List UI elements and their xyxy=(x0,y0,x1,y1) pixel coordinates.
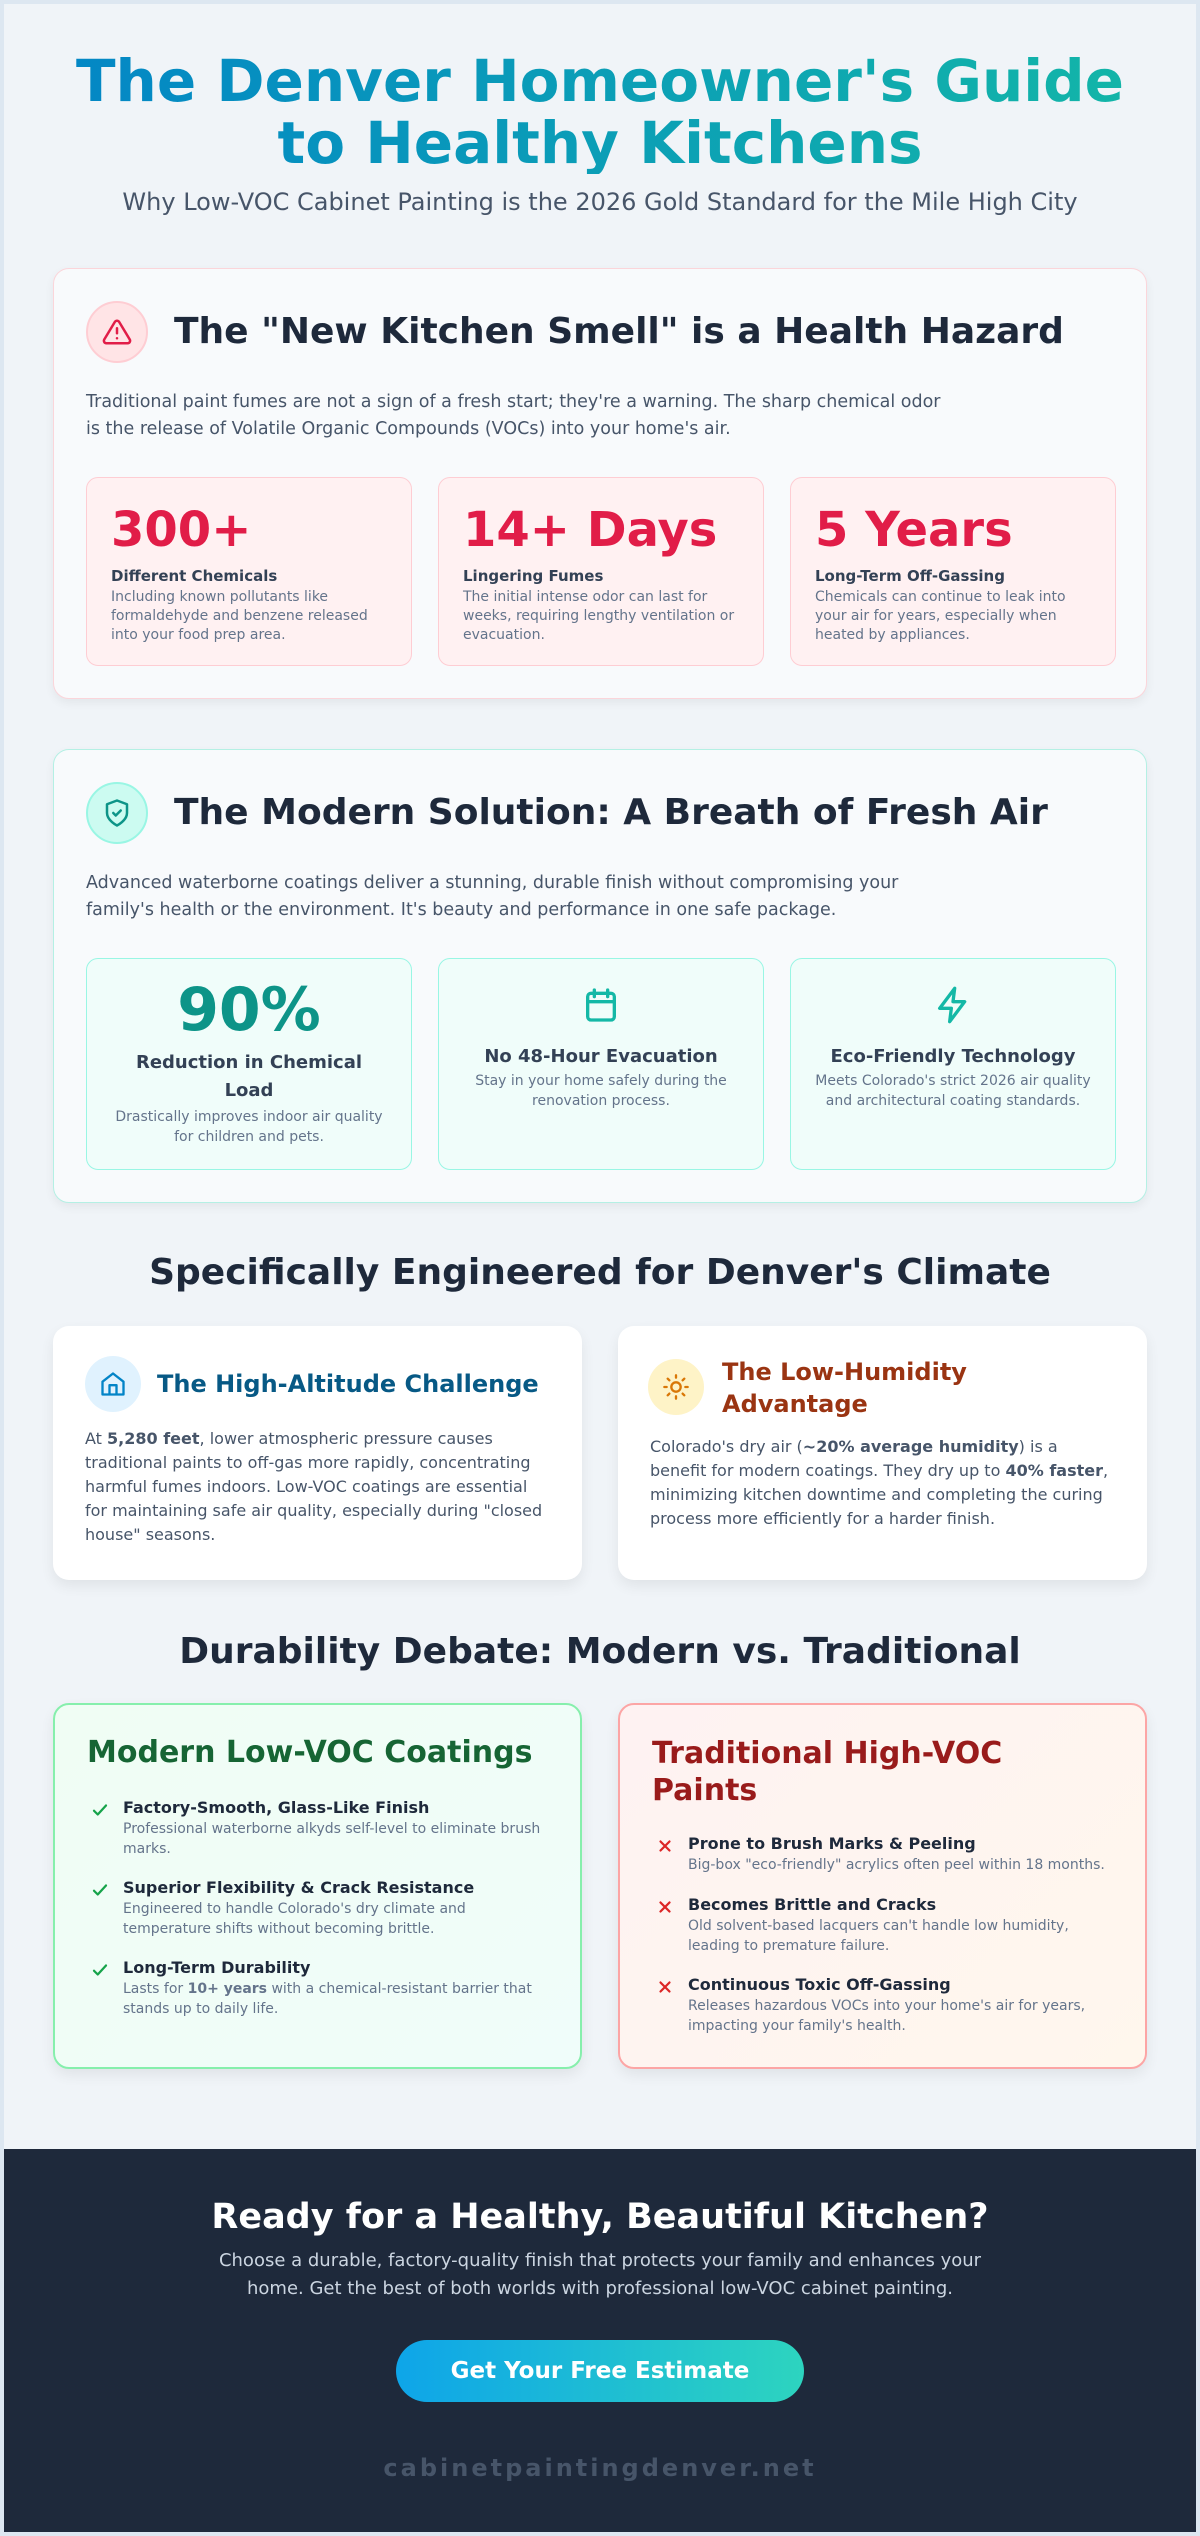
body: Colorado's dry air (~20% average humidity) is a benefit for modern coatings. They dry up to 40% faster, minimizing kitchen downtime and completing the curing process more efficiently for a harder finish. xyxy=(650,1437,1108,1528)
stat: 300+: 300+ xyxy=(111,502,251,558)
title xyxy=(652,1736,1002,1808)
benefit: eco tech xyxy=(790,958,1116,1170)
stat: 14+ days: The initial intense odor can last for weeks, requiring lengthy ventilation or evacuation. xyxy=(463,589,734,643)
title: Traditional High-VOC xyxy=(652,1736,1002,1771)
item: Old solvent-based lacquers can't handle low humidity, leading to premature failure. xyxy=(688,1918,1069,1954)
icon: warning xyxy=(86,301,148,363)
item xyxy=(659,1975,1085,2034)
heading: durability: Durability Debate: Modern vs. Traditional xyxy=(179,1631,1021,1672)
item: Professional waterborne alkyds self-level to eliminate brush marks. xyxy=(123,1821,540,1857)
card: modern coatings xyxy=(53,1703,582,2069)
item xyxy=(659,1834,1105,1873)
stat: 14+ days: 14+ Days xyxy=(463,502,717,558)
title: The High-Altitude Challenge xyxy=(157,1370,539,1398)
stat: 14+ days xyxy=(438,477,764,666)
benefit: 90% xyxy=(86,958,412,1170)
item: Releases hazardous VOCs into your home's air for years, impacting your family's health. xyxy=(688,1998,1085,2034)
item: Engineered to handle Colorado's dry climate and temperature shifts without becoming brittle. xyxy=(123,1901,466,1937)
intro text: Advanced waterborne coatings deliver a stunning, durable finish without compromising your family's health or the environment. It's beauty and performance in one safe package. xyxy=(86,873,898,920)
benefit: eco tech: Eco-Friendly Technology xyxy=(830,1046,1076,1067)
heading: climate: Specifically Engineered for Denver's Climate xyxy=(149,1252,1051,1293)
footer CTA xyxy=(4,2149,1196,2532)
subtitle: Why Low-VOC Cabinet Painting is the 2026 Gold Standard for the Mile High City xyxy=(122,188,1078,216)
stat: 300+: Different Chemicals xyxy=(111,567,277,585)
heading: The Modern Solution: A Breath of Fresh Air xyxy=(174,792,1048,833)
CTA text: Choose a durable, factory-quality finish that protects your family and enhances your home. Get the best of both worlds with professional low-VOC cabinet painting. xyxy=(219,2250,981,2299)
icon: house xyxy=(85,1356,141,1412)
benefit: 90%: Reduction in Chemical Load xyxy=(136,1052,362,1101)
button xyxy=(396,2340,804,2402)
stat: 14+ days: Lingering Fumes xyxy=(463,567,603,585)
benefit: 90%: Drastically improves indoor air quality for children and pets. xyxy=(115,1109,383,1145)
card: traditional paints xyxy=(618,1703,1147,2069)
benefit: 90%: 90% xyxy=(177,975,321,1045)
title: The Low-Humidity xyxy=(722,1358,967,1386)
card: low humidity xyxy=(618,1326,1147,1580)
CTA heading: Ready for a Healthy, Beautiful Kitchen? xyxy=(211,2197,989,2237)
icon: shield xyxy=(86,782,148,844)
benefit: no evacuation: No 48-Hour Evacuation xyxy=(484,1046,718,1067)
intro text: Traditional paint fumes are not a sign of a fresh start; they're a warning. The sharp chemical odor is the release of Volatile Organic Compounds (VOCs) into your home's air. xyxy=(86,392,940,439)
icon: sun xyxy=(648,1359,704,1415)
item xyxy=(92,1958,532,2017)
item: Becomes Brittle and Cracks xyxy=(688,1895,936,1914)
title: Modern Low-VOC Coatings xyxy=(87,1735,532,1770)
stat: 5 years: 5 Years xyxy=(815,502,1013,558)
benefit: eco tech: Meets Colorado's strict 2026 air quality and architectural coating standards. xyxy=(815,1073,1091,1109)
panel: health hazard xyxy=(53,268,1147,699)
card: high altitude xyxy=(53,1326,582,1580)
item xyxy=(92,1798,540,1857)
item: Big-box "eco-friendly" acrylics often peel within 18 months. xyxy=(688,1857,1105,1873)
item: Lasts for 10+ years with a chemical-resistant barrier that stands up to daily life. xyxy=(123,1981,532,2017)
title xyxy=(0,50,1200,174)
benefit: no evacuation: Stay in your home safely during the renovation process. xyxy=(475,1073,727,1109)
title: Paints xyxy=(652,1773,757,1808)
button: Get Your Free Estimate xyxy=(451,2358,749,2384)
item xyxy=(92,1878,474,1937)
heading: The "New Kitchen Smell" is a Health Hazard xyxy=(174,311,1064,352)
item: Prone to Brush Marks & Peeling xyxy=(688,1834,976,1853)
title: Advantage xyxy=(722,1390,868,1418)
domain: cabinetpaintingdenver.net xyxy=(383,2454,817,2482)
benefit: no evacuation xyxy=(438,958,764,1170)
title xyxy=(722,1358,967,1418)
item: Continuous Toxic Off-Gassing xyxy=(688,1975,951,1994)
stat: 5 years: Long-Term Off-Gassing xyxy=(815,567,1005,585)
stat: 5 years: Chemicals can continue to leak into your air for years, especially when heated by appliances. xyxy=(815,589,1066,643)
item: Factory-Smooth, Glass-Like Finish xyxy=(123,1798,429,1817)
stat: 300+ xyxy=(86,477,412,666)
item: Long-Term Durability xyxy=(123,1958,310,1977)
panel: modern solution xyxy=(53,749,1147,1203)
stat: 300+: Including known pollutants like formaldehyde and benzene released into your food prep area. xyxy=(111,589,368,643)
title: The Denver Homeowner's Guide xyxy=(76,47,1124,115)
stat: 5 years xyxy=(790,477,1116,666)
item: Superior Flexibility & Crack Resistance xyxy=(123,1878,474,1897)
item xyxy=(659,1895,1069,1954)
body: At 5,280 feet, lower atmospheric pressure causes traditional paints to off-gas more rapidly, concentrating harmful fumes indoors. Low-VOC coatings are essential for maintaining safe air quality, especially during "closed house" seasons. xyxy=(85,1429,542,1544)
title: to Healthy Kitchens xyxy=(277,109,923,177)
